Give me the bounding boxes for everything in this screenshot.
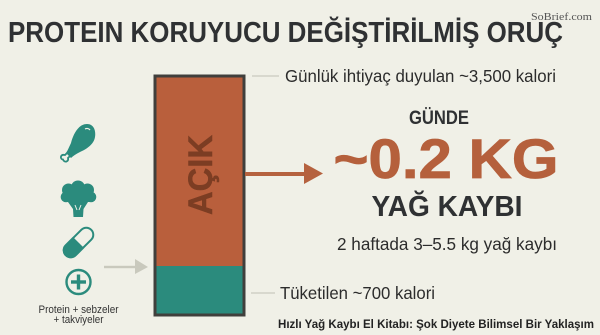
fat loss label: YAĞ KAYBI [372, 189, 522, 223]
arrow: food to bar [104, 259, 148, 274]
caption: protein, vegetables, supplements: Protein + sebzeler [38, 304, 119, 316]
two-week loss: 2 haftada 3–5.5 kg yağ kaybı [337, 234, 557, 254]
main figure: ~0.2 KG [334, 127, 558, 190]
icon: capsule [59, 224, 97, 262]
bar segment: consumed [155, 266, 244, 315]
label: daily need: Günlük ihtiyaç duyulan ~3,500 kalori [285, 66, 556, 86]
caption: protein, vegetables, supplements: + takviyeler [54, 314, 104, 326]
arrow: deficit to result [245, 163, 323, 184]
caption: protein, vegetables, supplements [38, 304, 119, 326]
watermark: SoBrief.com [531, 12, 592, 23]
icon: chicken leg [61, 124, 95, 162]
calorie bar [155, 76, 244, 315]
bar segment: deficit [155, 76, 244, 266]
bar outline [155, 76, 244, 315]
label: consumed: Tüketilen ~700 kalori [280, 283, 435, 303]
result text [334, 108, 558, 254]
icon: plus circle [66, 270, 90, 294]
per day label: GÜNDE [409, 108, 469, 129]
source line: Hızlı Yağ Kaybı El Kitabı: Şok Diyete Bilimsel Bir Yaklaşım [278, 317, 594, 331]
bar label: AÇIK [182, 135, 220, 215]
icon: broccoli [61, 180, 96, 217]
